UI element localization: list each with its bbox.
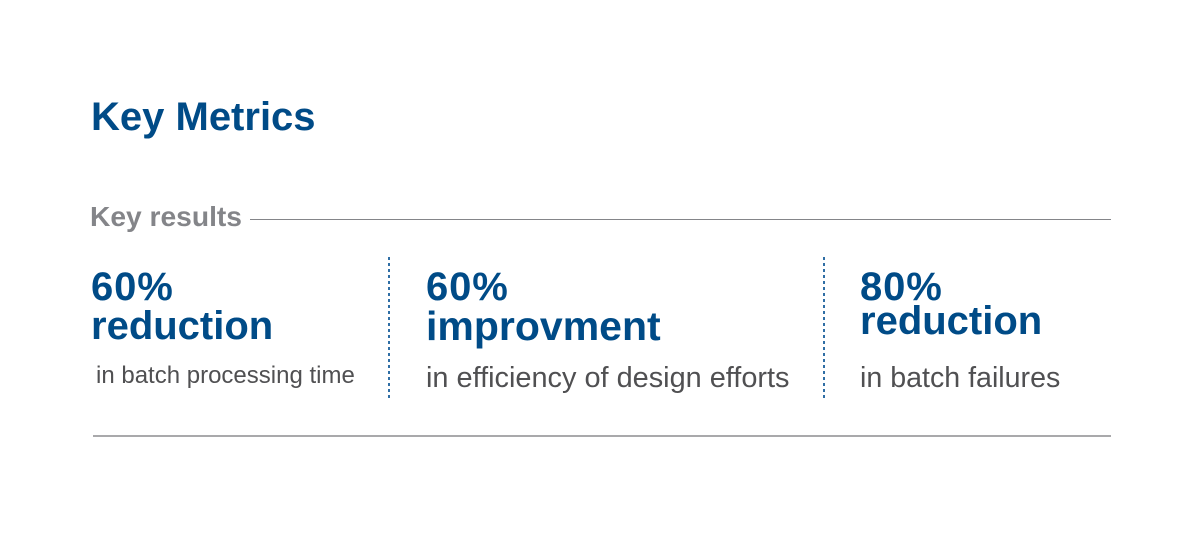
metric: 80% reduction: reduction (860, 299, 1042, 343)
metric: 60% improvment: improvment (426, 303, 661, 349)
title: Key Metrics (91, 95, 316, 139)
metric: 80% reduction: in batch failures (860, 362, 1060, 394)
section heading: key results: Key results (90, 200, 242, 232)
metric: 60% improvment (426, 265, 790, 394)
metric: 60% reduction: reduction (91, 304, 273, 348)
metric: 60% reduction: in batch processing time (96, 362, 355, 389)
metric: 80% reduction: 80% (860, 265, 943, 309)
metric: 60% improvment: in efficiency of design efforts (426, 362, 790, 394)
metric: 60% improvment: 60% (426, 265, 509, 309)
metric: 60% reduction (91, 265, 355, 389)
metric: 60% reduction: 60% (91, 265, 174, 309)
metric: 80% reduction (860, 265, 1060, 394)
